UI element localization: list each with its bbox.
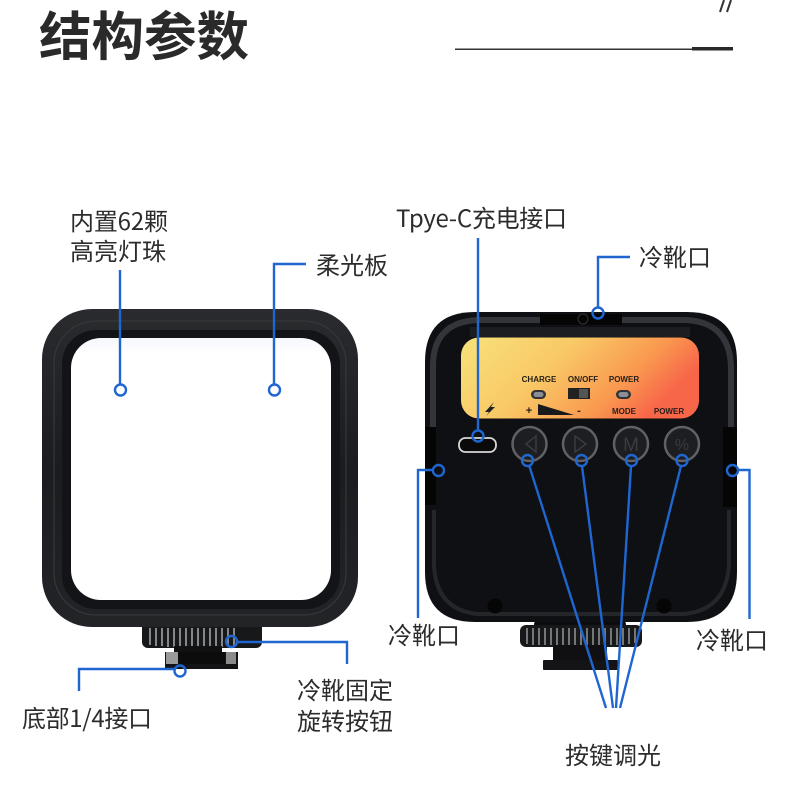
label panel markings: - (577, 405, 581, 417)
side slots (425, 427, 436, 505)
label panel markings: MODE (612, 407, 637, 416)
callout: bottom 1/4 port (22, 666, 186, 734)
label panel markings: CHARGE (522, 375, 557, 384)
callout: built-in LEDs: 内置62颗 (70, 202, 168, 237)
panel: front view of light (42, 309, 358, 669)
callout: Type-C charging port (396, 199, 567, 442)
callout: bottom 1/4 port: 底部1/4接口 (22, 699, 152, 734)
buttons (512, 427, 699, 461)
callout: diffuser (269, 246, 388, 396)
callout: top cold shoe: 冷靴口 (639, 238, 711, 273)
buttons: % (675, 437, 689, 454)
screw holes (488, 598, 502, 614)
label panel markings: POWER (654, 407, 684, 416)
callout: right cold shoe (696, 465, 768, 656)
label panel markings: + (526, 405, 532, 417)
buttons: M (623, 435, 639, 456)
callout: diffuser: 柔光板 (316, 246, 388, 281)
callout: cold shoe rotating knob: 旋转按钮 (297, 702, 393, 737)
label panel markings: POWER (609, 375, 639, 384)
callout: left cold shoe (388, 465, 460, 651)
panel: back view of light (425, 312, 737, 670)
outer frame (42, 309, 358, 627)
label panel markings (485, 375, 684, 417)
cold shoe knob front (142, 622, 262, 669)
callout: button dimming: 按键调光 (565, 736, 661, 771)
callout: left cold shoe: 冷靴口 (388, 616, 460, 651)
callout: right cold shoe: 冷靴口 (696, 621, 768, 656)
callout: Type-C charging port: Tpye-C充电接口 (396, 199, 567, 234)
callout: built-in LEDs (70, 202, 168, 396)
callout: cold shoe rotating knob: 冷靴固定 (297, 671, 393, 706)
callout: button dimming (522, 455, 688, 771)
diffuser panel (71, 338, 331, 600)
callout: built-in LEDs: 高亮灯珠 (70, 232, 166, 267)
orange label panel (461, 338, 699, 418)
label panel markings: ON/OFF (568, 375, 598, 384)
top cold shoe slot (540, 314, 622, 325)
device body (425, 312, 737, 622)
USB-C port (459, 438, 496, 452)
callout: cold shoe rotating knob (226, 636, 393, 737)
header decoration (455, 0, 733, 50)
cold shoe knob back (520, 614, 642, 670)
callout: top cold shoe (592, 238, 711, 318)
